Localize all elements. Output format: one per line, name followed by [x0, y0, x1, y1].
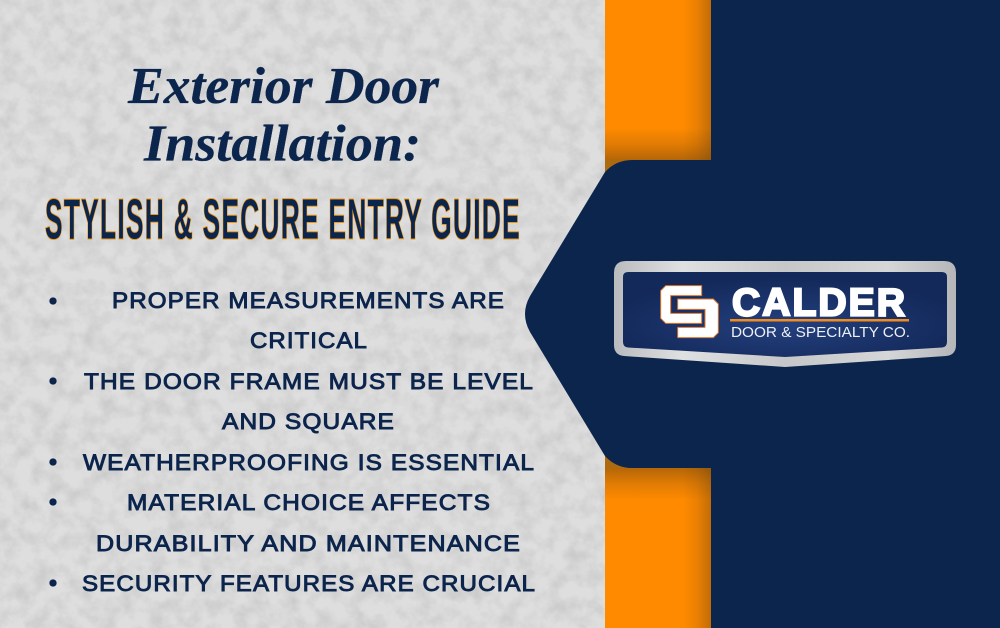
panel: navy arrow panel: [525, 0, 1000, 628]
bullet 4: [50, 490, 521, 556]
bullet 2: THE DOOR FRAME MUST BE LEVEL: [84, 369, 534, 394]
bullet list: [50, 288, 536, 596]
panel: orange stripe: [605, 0, 711, 628]
logo badge: [614, 261, 956, 367]
bullet 5: SECURITY FEATURES ARE CRUCIAL: [82, 571, 536, 596]
panel: textured background: [0, 0, 606, 628]
bullet 2: AND SQUARE: [222, 409, 395, 434]
title: Installation:: [143, 116, 421, 172]
bullet 1: CRITICAL: [250, 328, 368, 353]
logo name: CALDER: [732, 282, 907, 324]
title: Exterior Door: [127, 58, 440, 115]
bullet 4: MATERIAL CHOICE AFFECTS: [127, 490, 491, 515]
title: [127, 58, 440, 172]
logo tagline: DOOR & SPECIALTY CO.: [731, 324, 910, 341]
bullet 1: [50, 288, 505, 353]
bullet 4: DURABILITY AND MAINTENANCE: [96, 531, 521, 556]
icon: CD monogram: [661, 286, 718, 338]
logo rule: [730, 319, 909, 322]
bullet 1: PROPER MEASUREMENTS ARE: [112, 288, 505, 313]
bullet 2: [50, 369, 534, 434]
bullet 3: WEATHERPROOFING IS ESSENTIAL: [83, 450, 535, 475]
